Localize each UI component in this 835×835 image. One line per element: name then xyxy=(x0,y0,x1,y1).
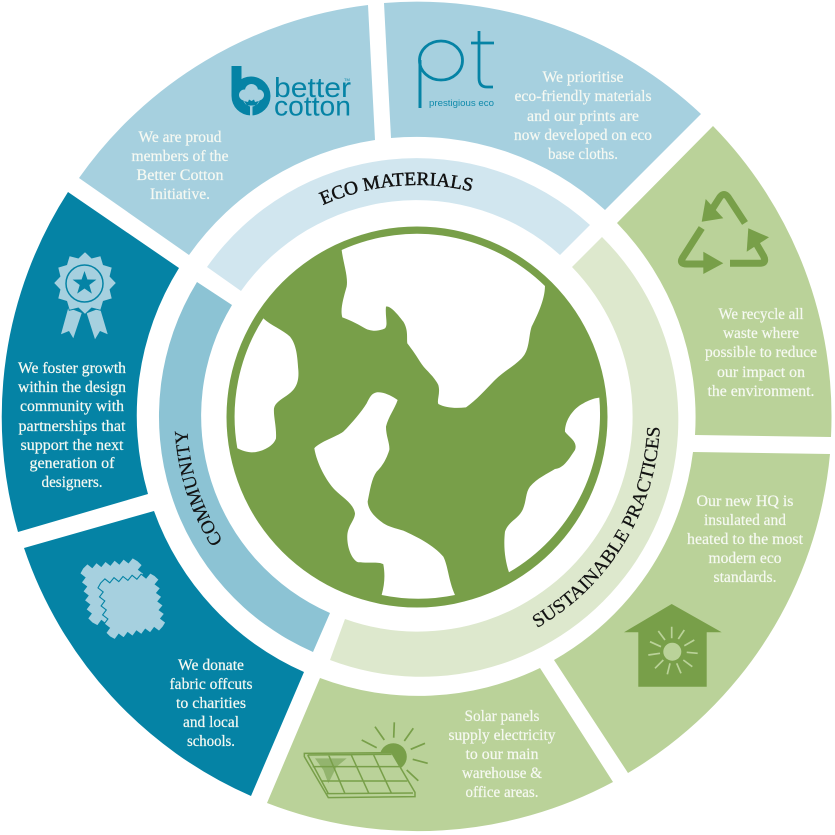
wedge: better cotton background xyxy=(79,5,375,255)
icon: pt prestigious eco logo xyxy=(420,31,494,109)
text: better cotton: We are proud xyxy=(138,129,222,146)
text: eco materials panel xyxy=(514,69,652,163)
text: eco materials panel: and our prints are xyxy=(527,108,639,125)
text: design community: within the design xyxy=(18,379,126,396)
text: design community: generation of xyxy=(30,455,115,472)
text: solar panels: office areas. xyxy=(466,784,538,801)
ring segment: sustainable practices xyxy=(330,237,678,677)
text: recycling: waste where xyxy=(723,325,799,342)
text: fabric donations: to charities xyxy=(176,695,246,712)
icon: recycle arrows xyxy=(681,194,769,274)
wedge: new HQ background xyxy=(554,452,830,773)
text: new HQ: insulated and xyxy=(704,512,786,529)
text: better cotton: members of the xyxy=(132,148,229,165)
text: recycling: We recycle all xyxy=(718,306,804,323)
text: design community: partnerships that xyxy=(18,418,126,435)
icon: house with sun xyxy=(624,604,722,687)
text: eco materials panel: now developed on eco xyxy=(514,127,652,144)
panel: recycling xyxy=(617,126,832,437)
text: better cotton: Better Cotton xyxy=(136,167,224,184)
panel: prestigious eco xyxy=(384,2,701,210)
text: new HQ: Our new HQ is xyxy=(696,493,794,510)
text: design community: designers. xyxy=(42,474,102,491)
text: eco materials panel: We prioritise xyxy=(542,69,624,86)
wedge: recycling background xyxy=(617,126,832,437)
wedge: fabric donations background xyxy=(24,511,304,796)
text: design community: We foster growth xyxy=(18,360,126,377)
icon: solar panel with sun xyxy=(304,722,428,798)
text: solar panels xyxy=(448,708,556,801)
icon: award rosette xyxy=(54,252,116,339)
panel: fabric donations xyxy=(24,511,304,796)
text: solar panels: to our main xyxy=(466,746,539,763)
text: eco materials panel: eco-friendly materials xyxy=(514,88,652,105)
ring segment: community xyxy=(159,282,330,652)
panel: design community xyxy=(2,192,179,532)
text: solar panels: warehouse & xyxy=(462,765,542,782)
text: solar panels: Solar panels xyxy=(464,708,540,725)
wedge: design community background xyxy=(2,192,179,532)
text: new HQ xyxy=(687,493,804,586)
text: new HQ: modern eco xyxy=(708,550,782,567)
panel: solar panels xyxy=(267,668,613,831)
panel: new HQ xyxy=(554,452,830,773)
text: fabric donations: fabric offcuts xyxy=(170,676,252,693)
text: design community xyxy=(18,360,126,491)
ring segment: eco materials xyxy=(207,158,590,291)
wedge: solar panels background xyxy=(267,668,613,831)
text: new HQ: standards. xyxy=(714,569,776,586)
globe xyxy=(226,226,608,608)
icon: fabric swatches xyxy=(80,558,166,640)
text: recycling: possible to reduce xyxy=(705,344,817,361)
panel: better cotton xyxy=(79,5,375,255)
icon: better cotton logo: cotton xyxy=(274,90,351,122)
text: recycling xyxy=(705,306,817,400)
ring segment: sustainable practices: SUSTAINABLE PRACTICES xyxy=(532,428,660,628)
text: solar panels: supply electricity xyxy=(448,727,556,744)
text: new HQ: heated to the most xyxy=(687,531,804,548)
text: recycling: the environment. xyxy=(708,383,814,400)
text: fabric donations xyxy=(170,657,252,750)
text: fabric donations: We donate xyxy=(178,657,244,674)
icon: better cotton logo: better xyxy=(274,72,351,103)
text: fabric donations: schools. xyxy=(187,733,235,750)
text: better cotton xyxy=(132,129,229,203)
text: design community: support the next xyxy=(20,437,124,454)
text: design community: community with xyxy=(20,398,124,415)
text: eco materials panel: base cloths. xyxy=(548,146,618,163)
wedge: prestigious eco background xyxy=(384,2,701,210)
text: recycling: our impact on xyxy=(717,364,805,381)
ring segment: eco materials: ECO MATERIALS xyxy=(318,172,473,206)
icon: better cotton logo: TM xyxy=(344,77,350,82)
text: better cotton: Initiative. xyxy=(150,186,210,203)
text: fabric donations: and local xyxy=(183,714,239,731)
ring segment: community: COMMUNITY xyxy=(174,431,221,545)
icon: better cotton logo xyxy=(232,66,351,122)
icon: pt prestigious eco logo: prestigious eco xyxy=(429,98,494,109)
